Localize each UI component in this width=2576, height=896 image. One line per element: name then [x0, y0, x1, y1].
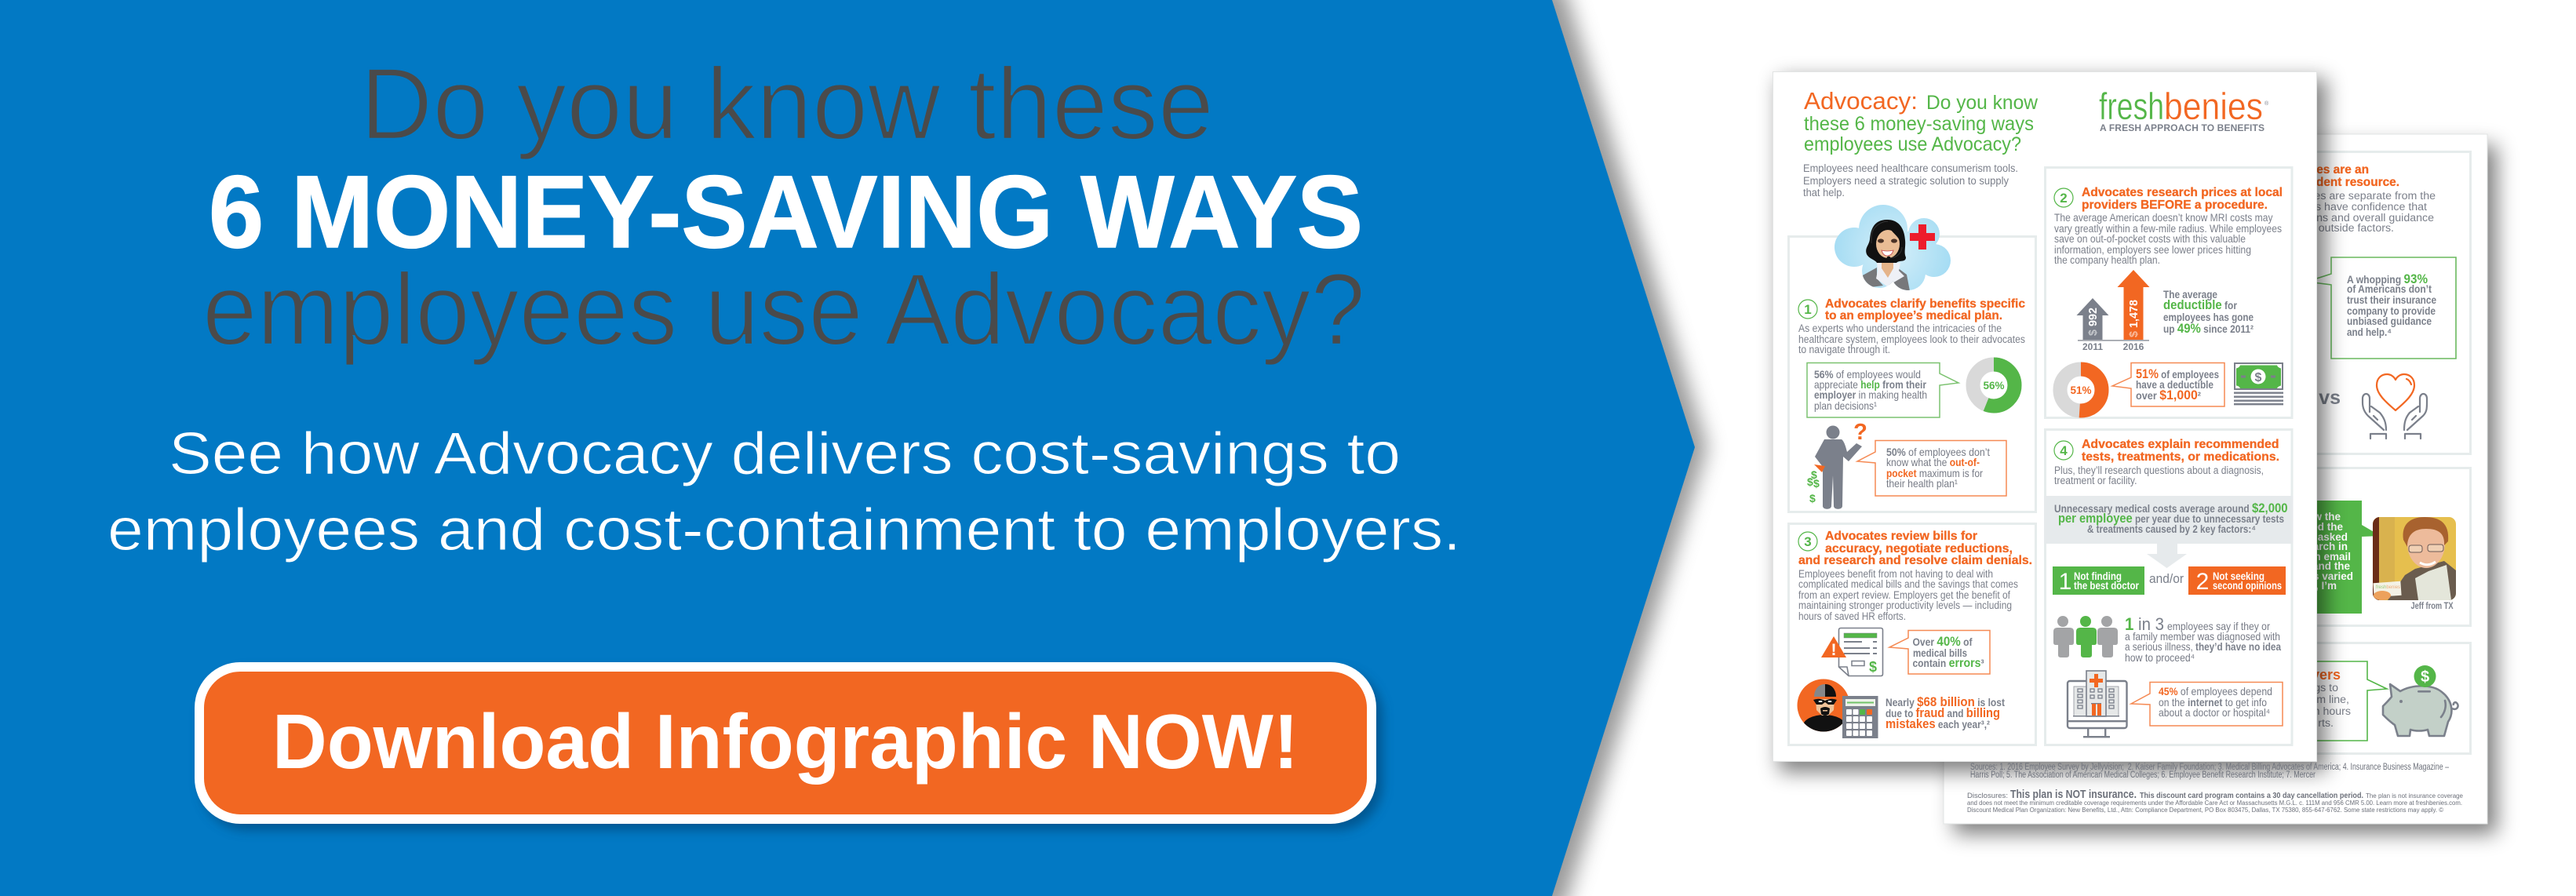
icon: piggy bank: $	[2421, 668, 2429, 686]
stat: deductible 49 percent: employees has gone	[2163, 311, 2254, 323]
body text 2: The average American doesn’t know MRI costs may	[2054, 212, 2273, 224]
heading 1: to an employee’s medical plan.	[1825, 309, 2002, 322]
button: download infographic	[199, 667, 1383, 830]
subheading text: employees and cost-containment to employers.	[107, 497, 1461, 563]
arrow: down	[2147, 544, 2187, 568]
heading: 6 money-saving ways: 6 MONEY-SAVING WAYS	[209, 154, 1363, 269]
icon: confused man with money: $	[1807, 475, 1813, 488]
number badge 1: 1	[1804, 302, 1812, 317]
heading 4	[2082, 438, 2279, 464]
panel: independent resource: by outside factors.	[2304, 222, 2394, 235]
body text 4	[2054, 464, 2264, 487]
callout: 50 percent: know what the out-of-	[1886, 457, 1980, 468]
callout: 45 percent: on the internet to get info	[2159, 697, 2267, 708]
callout: 93 percent: A whopping 93%	[2347, 271, 2428, 286]
panel 2: research prices	[2045, 168, 2292, 417]
factor 1 box: 1	[2059, 569, 2071, 595]
body text 3: maintaining stronger productivity levels — including	[1798, 599, 2012, 612]
panel: independent resource: rvices are separate from the	[2297, 190, 2436, 202]
icon: piggy bank	[2383, 665, 2458, 736]
page: back infographic sheet	[1944, 134, 2497, 834]
callout: 51 percent	[2112, 362, 2224, 406]
factor 1 box: Not finding	[2074, 570, 2122, 582]
heading 2	[2082, 186, 2283, 212]
logo: freshbenies	[2099, 86, 2269, 133]
callout: green quote: an email	[2308, 551, 2351, 563]
panel: independent resource: yees have confidence that	[2297, 201, 2427, 213]
icon: bill with warning: !	[1831, 641, 1836, 659]
callout: 56 percent: employer in making health	[1814, 389, 1927, 401]
panel: independent resource: ations and overall guidance	[2298, 212, 2434, 224]
photo: jeff: freshbenies	[2376, 585, 2400, 590]
factor 2 box	[2188, 566, 2286, 595]
number badge 2	[2054, 188, 2073, 207]
button: download infographic: Download Infographic NOW!	[272, 698, 1299, 785]
callout: 56 percent: plan decisions¹	[1814, 400, 1877, 412]
stat: 1 in 3: 1 in 3	[2125, 614, 2164, 634]
shadow: front sheet	[1779, 78, 2326, 772]
body text 1: healthcare system, employees look to their advocates	[1798, 333, 2025, 346]
label: and/or: and/or	[2149, 571, 2184, 586]
panel 4: explain tests	[2044, 430, 2293, 745]
icon: heart in hands	[2363, 374, 2427, 439]
panel: employers savings	[2119, 643, 2470, 753]
intro text: Employees need healthcare consumerism tools.	[1803, 162, 2018, 175]
body text 3: Employees benefit from not having to deal with	[1798, 568, 1993, 581]
callout: green quote: ces varied	[2301, 570, 2353, 582]
sources and disclosures: Harris Poll; 5. The Association of American Medical Colleges; 6. Employee Benefit Research Institute; 7. Mercer	[1970, 770, 2315, 780]
stat: 1 in 3	[2125, 614, 2281, 664]
number badge 3: 3	[1804, 534, 1812, 549]
panel: independent resource: dent resource.	[2316, 176, 2399, 189]
heading 4: Advocates explain recommended	[2082, 438, 2279, 451]
icon: confused man with money	[1807, 420, 1867, 509]
callout: 40 percent: Over 40% of	[1913, 634, 1973, 649]
stat: deductible 49 percent: up 49% since 2011²	[2163, 321, 2254, 336]
callout: employers: in hours	[2312, 705, 2351, 718]
icon: thief with calculator	[1797, 679, 1878, 738]
stat: 68 billion	[1886, 694, 2005, 731]
icon: money stack	[2234, 363, 2283, 405]
icon: three people	[2053, 616, 2118, 657]
heading 1	[1825, 297, 2025, 322]
sources and disclosures: Disclosures:	[1967, 792, 2008, 800]
chart: deductible arrows: $ 1,478	[2127, 300, 2141, 337]
body text 1: to navigate through it.	[1798, 344, 1890, 356]
icon: confused man with money: ?	[1853, 420, 1867, 445]
chart: deductible arrows: 2016	[2123, 341, 2144, 352]
body text 2: the company health plan.	[2054, 254, 2160, 267]
stat: 1 in 3: a family member was diagnosed with	[2125, 631, 2280, 643]
caption: jeff from tx: Jeff from TX	[2410, 600, 2453, 611]
callout: 56 percent	[1807, 362, 1958, 417]
body text 2: vary greatly within a few-mile radius. While employees	[2054, 223, 2282, 235]
stat: 1 in 3: how to proceed⁴	[2125, 652, 2195, 664]
sources and disclosures: and does not meet the minimum creditable coverage requirements under the Affordable Care Act or Massachusetts M.G.L. c. 111M and 956 CMR 5.00. Learn more at freshbenies.com.	[1967, 799, 2462, 807]
logo: freshbenies: A FRESH APPROACH TO BENEFITS	[2100, 122, 2264, 133]
callout: 45 percent: 45% of employees depend	[2159, 686, 2272, 697]
callout: 93 percent: trust their insurance	[2347, 294, 2436, 306]
panel: testimonial	[2317, 467, 2472, 627]
callout: green quote	[2197, 501, 2381, 614]
icon: red cross	[1910, 224, 1935, 249]
illustration: advocate in cloud	[1835, 205, 1951, 290]
stat: deductible 49 percent	[2163, 289, 2254, 336]
panel: independent resource: es are an	[2316, 163, 2369, 177]
logo: freshbenies: fresh	[2099, 86, 2164, 128]
factor 2 box: 2	[2196, 569, 2209, 595]
intro text	[1803, 162, 2018, 199]
callout: 50 percent: 50% of employees don’t	[1886, 446, 1990, 458]
photo: jeff	[2373, 517, 2456, 600]
heading 3: Advocates review bills for	[1825, 530, 1977, 543]
heading: employees use advocacy: employees use Advocacy?	[202, 252, 1365, 366]
stat: 68 billion: mistakes each year³,²	[1886, 716, 1990, 731]
callout: green quote: 0, I’m	[2309, 580, 2337, 592]
icon: bill with warning	[1821, 628, 1883, 676]
callout: 40 percent: contain errors³	[1913, 657, 1984, 670]
subheading text: See how Advocacy delivers cost-savings to	[169, 421, 1401, 487]
body text 2: information, employers see lower prices hitting	[2054, 244, 2251, 257]
icon: money stack: $	[2255, 371, 2262, 384]
callout: 50 percent: pocket maximum is for	[1886, 468, 1983, 479]
title: Advocacy:	[1804, 87, 1918, 115]
stat: 1 in 3: a serious illness, they’d have no idea	[2125, 641, 2281, 653]
stat: 68 billion: Nearly $68 billion is lost	[1886, 694, 2005, 709]
callout: green quote: nd asked	[2301, 531, 2348, 543]
callout: 56 percent: appreciate help from their	[1814, 379, 1927, 391]
icon: hospital on monitor	[2068, 671, 2126, 738]
heading: do you know these: Do you know these	[360, 46, 1214, 161]
callout: 40 percent	[1889, 631, 1990, 674]
heading 1: Advocates clarify benefits specific	[1825, 297, 2025, 311]
panel 1: clarify benefits	[1789, 200, 2035, 512]
stat: deductible 49 percent: The average	[2163, 289, 2217, 300]
stat: 1 in 3: employees say if they or	[2167, 621, 2270, 632]
intro text: Employers need a strategic solution to supply	[1803, 175, 2009, 188]
sources and disclosures: The plan is not insurance coverage	[2366, 792, 2464, 799]
heading 4: tests, treatments, or medications.	[2082, 450, 2279, 464]
donut chart: 56 percent: 56%	[1983, 380, 2005, 392]
sources and disclosures: This plan is NOT insurance.	[2010, 788, 2137, 801]
body text 4: Plus, they’ll research questions about a diagnosis,	[2054, 464, 2264, 477]
body text 3: from an expert review. Employers get the benefit of	[1798, 589, 2010, 602]
body text 3: hours of saved HR efforts.	[1798, 610, 1906, 623]
number badge 2: 2	[2060, 191, 2068, 206]
donut chart: 51 percent	[2060, 369, 2101, 411]
callout: 56 percent: 56% of employees would	[1814, 369, 1921, 381]
title	[1804, 87, 2039, 155]
sources and disclosures: This discount card program contains a 30 day cancellation period.	[2140, 791, 2363, 800]
callout: green quote: ew the	[2308, 511, 2341, 523]
callout: green quote: s and the	[2304, 560, 2350, 572]
body text 1	[1798, 322, 2025, 356]
callout: employers: om line,	[2310, 694, 2349, 706]
donut chart: 56 percent	[1973, 364, 2015, 406]
number badge 4	[2054, 441, 2073, 460]
callout: employers: rts.	[2318, 717, 2334, 730]
title: these 6 money-saving ways	[1804, 113, 2034, 135]
body text 2: save on out-of-pocket costs with this valuable	[2054, 233, 2246, 246]
factor 1 box	[2053, 566, 2144, 595]
heading 2: Advocates research prices at local	[2082, 186, 2283, 199]
factor 2 box: Not seeking	[2213, 570, 2264, 582]
callout: green quote: earch in	[2307, 541, 2348, 552]
title: employees use Advocacy?	[1804, 133, 2021, 155]
callout: 50 percent: their health plan¹	[1886, 478, 1958, 490]
band: unnecessary costs: per employee per year due to unnecessary tests	[2058, 511, 2284, 526]
icon: bill with warning: $	[1869, 659, 1877, 675]
factor 1 box: the best doctor	[2074, 580, 2140, 592]
body text 3: complicated medical bills and the savings that comes	[1798, 578, 2018, 591]
body text 1: As experts who understand the intricacies of the	[1798, 322, 2002, 335]
subheading text	[107, 421, 1461, 563]
chart: deductible arrows	[2076, 270, 2150, 352]
band: unnecessary costs: Unnecessary medical costs average around $2,000	[2054, 501, 2288, 515]
callout: green quote: lled the	[2306, 521, 2343, 533]
chart: deductible arrows: $ 992	[2086, 308, 2100, 336]
sources and disclosures	[1967, 763, 2464, 814]
heading 3	[1798, 530, 2032, 567]
callout: 93 percent: of Americans don’t	[2347, 283, 2432, 295]
callout: 51 percent: over $1,000²	[2136, 388, 2201, 402]
callout: 51 percent: 51% of employees	[2136, 366, 2219, 381]
number badge 4: 4	[2060, 443, 2068, 458]
callout: employers: yers	[2312, 667, 2341, 683]
callout: 93 percent: company to provide	[2347, 305, 2436, 317]
logo: freshbenies: benies	[2164, 86, 2263, 128]
logo: freshbenies: ®	[2264, 100, 2269, 107]
title: Do you know	[1926, 92, 2039, 114]
icon: confused man with money: $	[1809, 492, 1816, 504]
stat: 68 billion: due to fraud and billing	[1886, 705, 2000, 720]
callout: employers	[2197, 661, 2387, 741]
callout: 45 percent: about a doctor or hospital⁴	[2159, 707, 2270, 719]
factor 2 box: second opinions	[2213, 580, 2282, 592]
icon: confused man with money: $	[1813, 477, 1820, 490]
panel: independent resource	[2119, 152, 2470, 453]
label: vs: vs	[2319, 387, 2341, 409]
panel 3: review bills	[1789, 524, 2035, 745]
chart: deductible arrows: 2011	[2082, 341, 2103, 352]
sources and disclosures: Discount Medical Plan Organization: New Benefits, Ltd., Attn: Compliance Department, PO Box 803475, Dallas, TX 75380, 855-647-6762. Some state restrictions may apply. ©	[1967, 807, 2443, 814]
heading 3: and research and resolve claim denials.	[1798, 554, 2032, 567]
page: front infographic sheet	[1773, 72, 2316, 761]
callout: 45 percent	[2131, 683, 2283, 726]
donut chart: 51 percent: 51%	[2070, 384, 2092, 396]
sources and disclosures: Sources: 1. 2016 Employee Survey by Jellyvision; 2. Kaiser Family Foundation; 3. Medical Billing Advocates of America; 4. Insurance Business Magazine –	[1970, 763, 2449, 772]
heading 2: providers BEFORE a procedure.	[2082, 199, 2268, 212]
body text 2	[2054, 212, 2282, 267]
band: unnecessary costs	[2044, 496, 2293, 544]
panel: blue arrow banner	[0, 0, 1707, 896]
callout: 50 percent	[1857, 441, 2006, 496]
stat: deductible 49 percent: deductible for	[2163, 297, 2238, 312]
intro text: that help.	[1803, 187, 1845, 199]
icon: confused man with money: $	[1811, 468, 1817, 481]
number badge 3	[1798, 532, 1817, 551]
band: unnecessary costs: & treatments caused by 2 key factors:⁴	[2087, 523, 2256, 535]
callout: employers: gs to	[2314, 682, 2338, 694]
callout: 40 percent: medical bills	[1913, 647, 1967, 659]
callout: 93 percent: and help.⁴	[2347, 326, 2392, 338]
callout: 93 percent	[2307, 257, 2456, 359]
heading 3: accuracy, negotiate reductions,	[1825, 542, 2013, 555]
body text 3	[1798, 568, 2018, 623]
callout: 93 percent: unbiased guidance	[2347, 315, 2432, 327]
number badge 1	[1798, 300, 1817, 319]
callout: 51 percent: have a deductible	[2136, 379, 2213, 391]
body text 4: treatment or facility.	[2054, 475, 2137, 487]
